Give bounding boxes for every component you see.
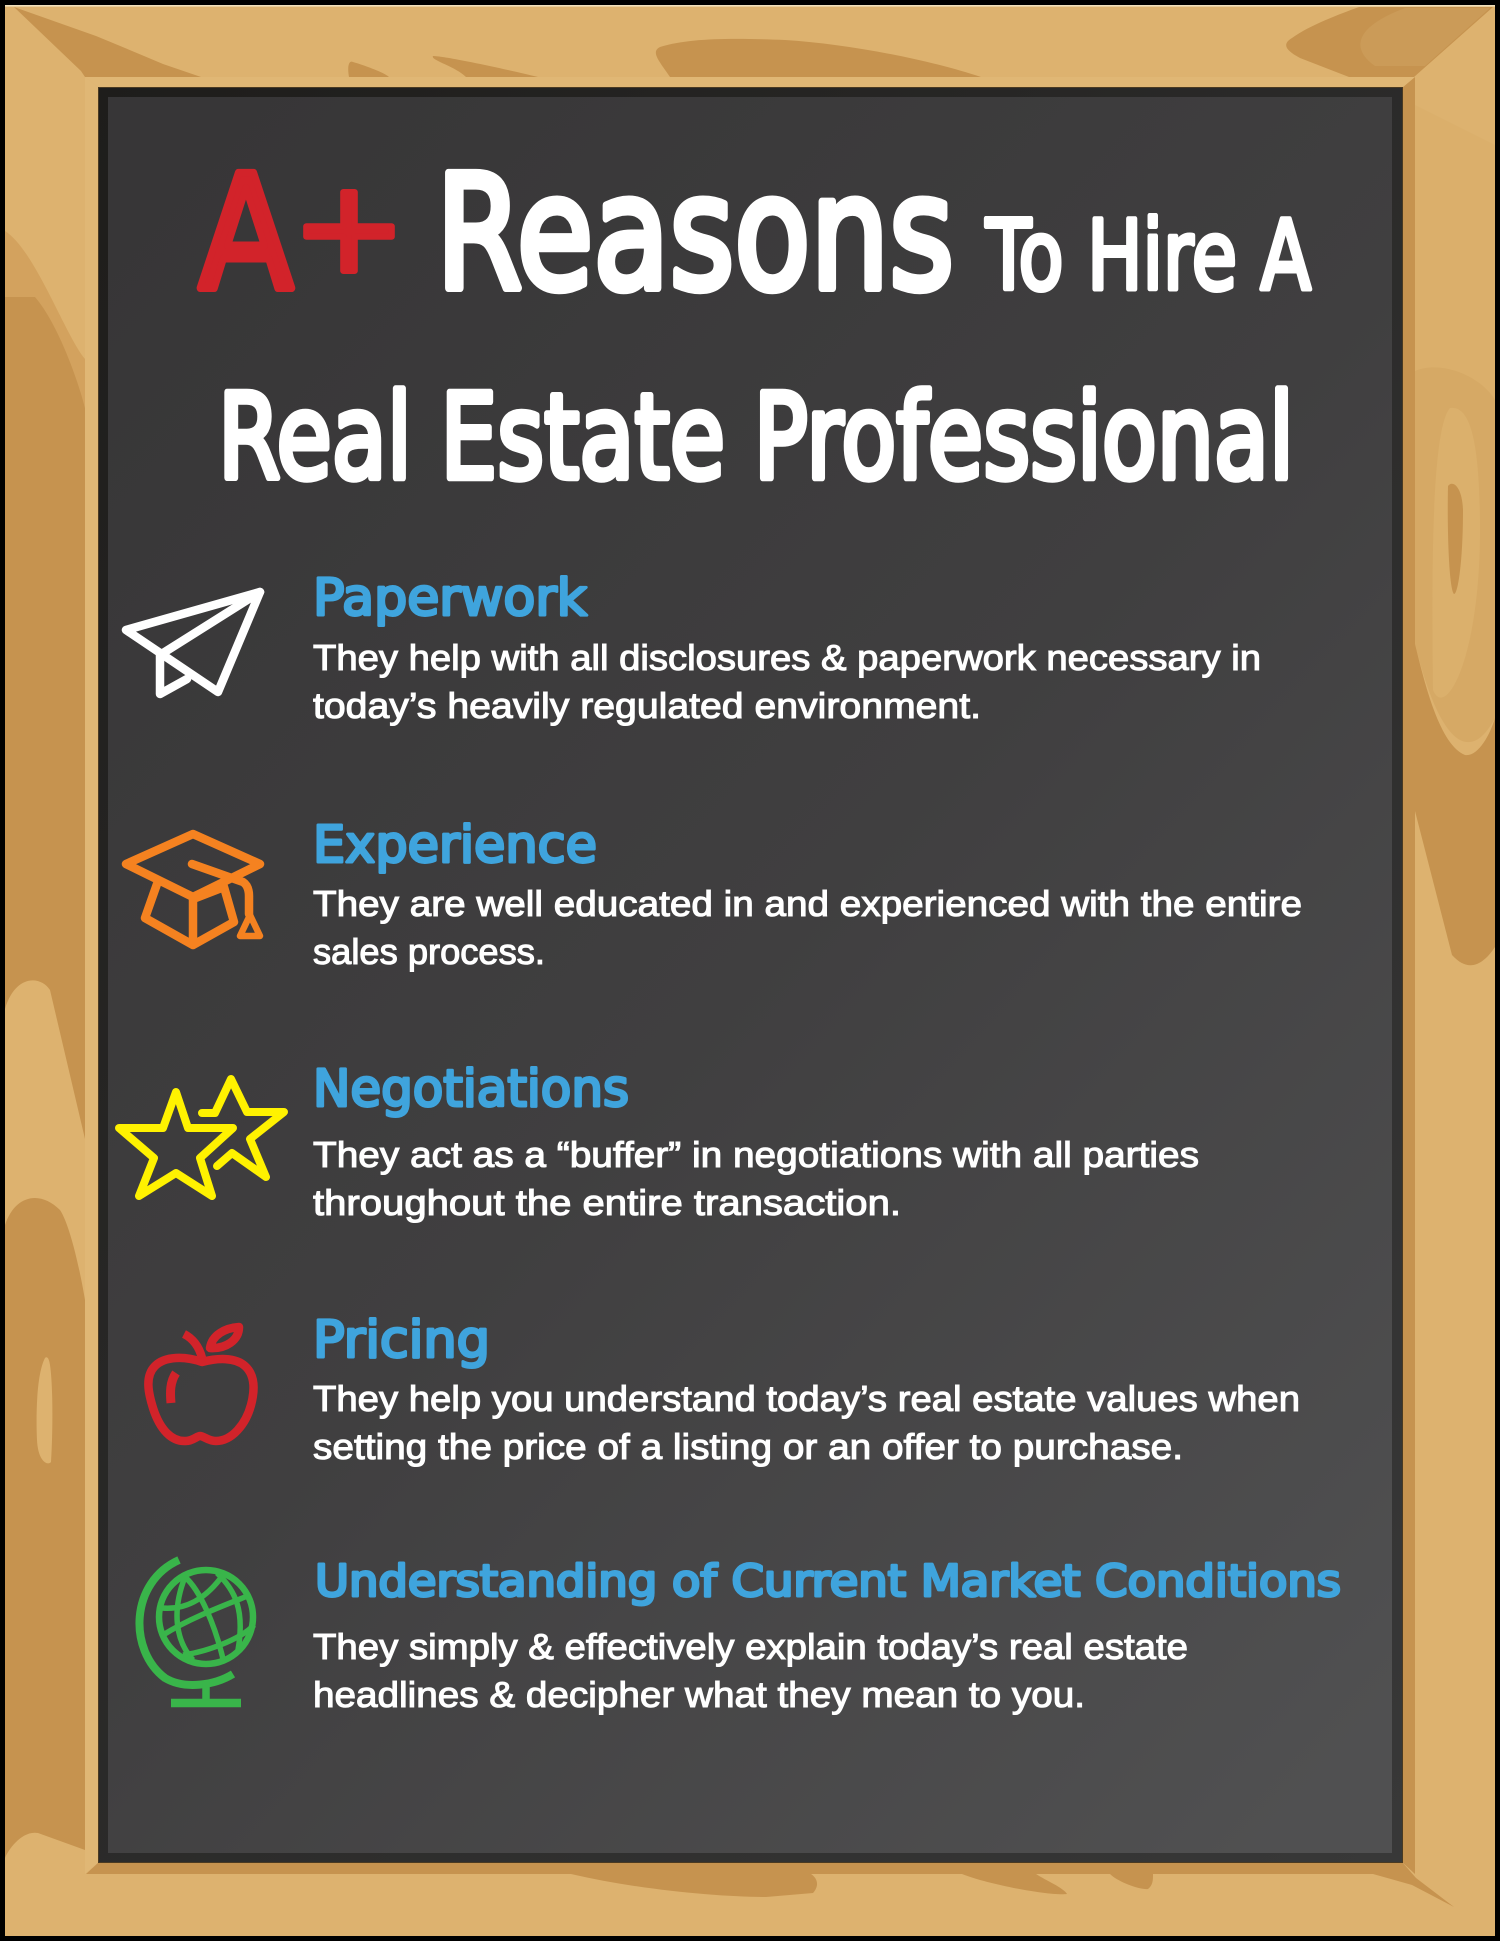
text: market conditions description: headlines & decipher what they mean to you. <box>313 1674 1085 1715</box>
icon: paper plane <box>126 592 260 694</box>
title: Reasons: Reasons <box>436 142 954 326</box>
heading: Pricing: Pricing <box>313 1311 490 1370</box>
wood grain: top right <box>1286 7 1493 77</box>
icon: graduation cap <box>126 834 260 945</box>
text: experience description: sales process. <box>313 931 545 972</box>
text: pricing description <box>313 1378 1300 1467</box>
wood grain: top knots <box>348 39 981 77</box>
icon: two stars <box>119 1079 284 1196</box>
heading: Understanding of Current Market Conditions: Understanding of Current Market Conditions <box>315 1556 1341 1607</box>
title: A plus: A <box>199 142 293 326</box>
text: negotiations description <box>313 1134 1199 1223</box>
title: A plus: + <box>292 154 406 301</box>
chalkboard <box>98 87 1403 1863</box>
text: experience description: They are well educated in and experienced with the entire <box>313 883 1302 924</box>
panel: market conditions <box>139 1556 1341 1715</box>
text: negotiations description: They act as a “buffer” in negotiations with all parties <box>313 1134 1199 1175</box>
panel: negotiations <box>119 1060 1199 1223</box>
heading: Negotiations: Negotiations <box>313 1060 629 1119</box>
wood grain: right knot <box>1415 105 1495 734</box>
panel: paperwork <box>126 569 1261 726</box>
title: To Hire A: To Hire A <box>985 200 1311 312</box>
text: paperwork description <box>313 637 1261 726</box>
text: paperwork description: They help with all disclosures & paperwork necessary in <box>313 637 1261 678</box>
panel: pricing <box>148 1311 1300 1467</box>
text: negotiations description: throughout the entire transaction. <box>313 1182 901 1223</box>
text: paperwork description: today’s heavily regulated environment. <box>313 685 981 726</box>
wood grain: top left <box>14 7 201 77</box>
wood grain: bottom knots <box>571 1874 1153 1897</box>
heading: Experience: Experience <box>313 816 597 875</box>
text: pricing description: setting the price of a listing or an offer to purchase. <box>313 1426 1183 1467</box>
text: pricing description: They help you understand today’s real estate values when <box>313 1378 1300 1419</box>
text: market conditions description <box>313 1626 1188 1715</box>
text: experience description <box>313 883 1302 972</box>
icon: apple <box>148 1327 253 1441</box>
text: market conditions description: They simply & effectively explain today’s real estate <box>313 1626 1188 1667</box>
panel: experience <box>126 816 1302 972</box>
icon: globe <box>139 1560 254 1703</box>
heading: Paperwork: Paperwork <box>313 569 587 628</box>
knot: left <box>37 1357 52 1463</box>
title <box>199 142 1311 506</box>
wood grain: left side <box>5 231 85 408</box>
title: A plus <box>199 142 406 326</box>
